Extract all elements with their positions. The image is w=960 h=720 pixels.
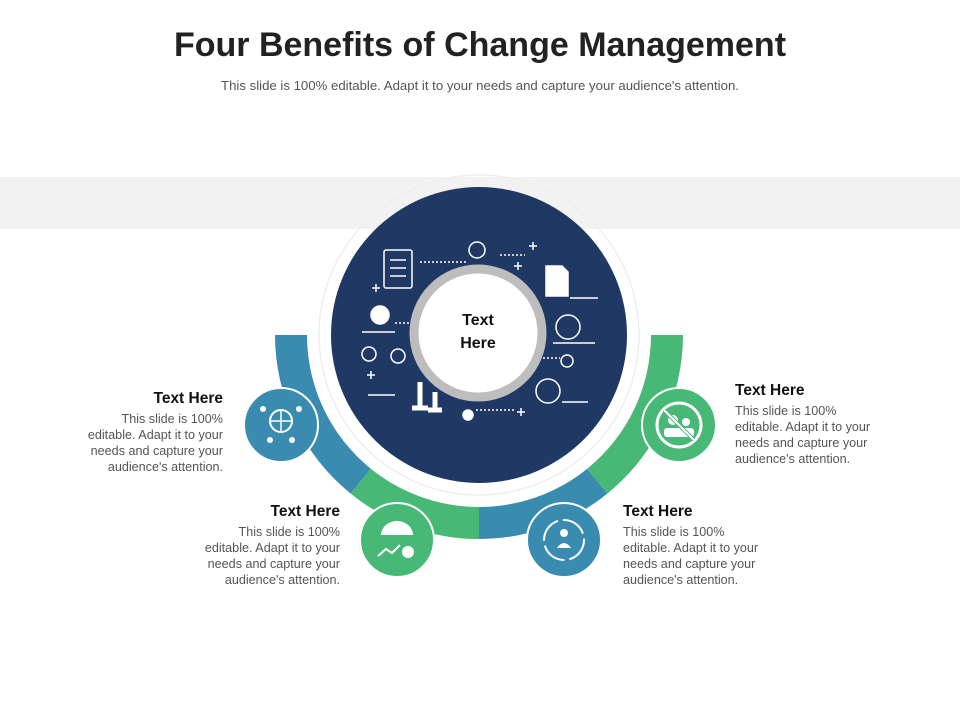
inner ring (414, 269, 542, 397)
navy circle (331, 187, 627, 483)
icon circle: umbrella growth (360, 503, 434, 577)
icon circle: change cycle (527, 503, 601, 577)
text block: bottom right: This slide is 100% editable. Adapt it to your needs and capture your audience's attention. (623, 525, 758, 587)
icon circle: no people (642, 388, 716, 462)
text block: bottom right: Text Here (623, 503, 692, 520)
text block: right upper: This slide is 100% editable. Adapt it to your needs and capture your audience's attention. (735, 404, 870, 466)
text block: left upper: This slide is 100% editable. Adapt it to your needs and capture your audience's attention. (88, 412, 223, 474)
icon circle: globe network (244, 388, 318, 462)
title: Four Benefits of Change Management (174, 26, 786, 64)
gray band (0, 177, 960, 229)
text block: right upper: Text Here (735, 382, 804, 399)
text block: bottom left: This slide is 100% editable. Adapt it to your needs and capture your audience's attention. (205, 525, 340, 587)
subtitle: This slide is 100% editable. Adapt it to your needs and capture your audience's attention. (221, 78, 739, 93)
arc ring (275, 335, 683, 539)
center icons (362, 242, 598, 420)
text block: bottom left: Text Here (270, 503, 340, 520)
text block: left upper: Text Here (154, 390, 223, 407)
center text: Text (462, 312, 495, 329)
diagram: Here (460, 335, 496, 352)
